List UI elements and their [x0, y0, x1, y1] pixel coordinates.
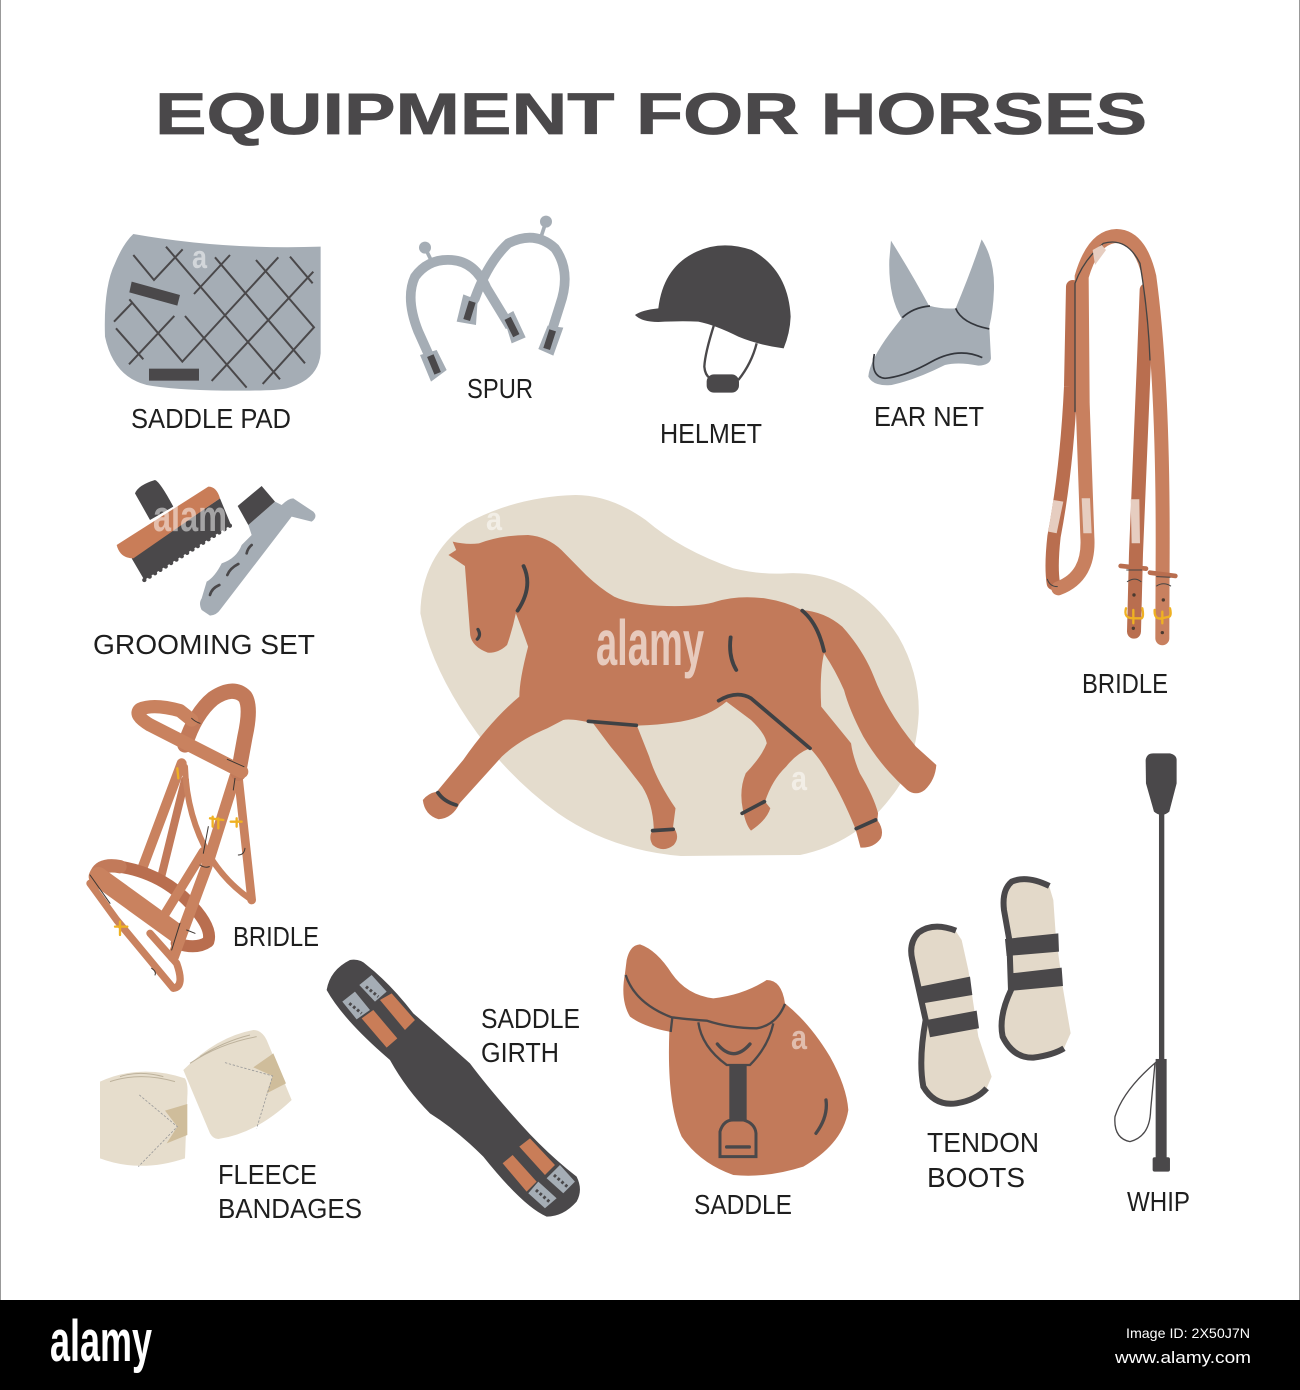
icon: whip — [1115, 753, 1177, 1172]
small watermarks: a — [791, 760, 808, 798]
right bandage — [183, 1030, 292, 1139]
label: ear net: EAR NET — [874, 401, 984, 432]
label: spur: SPUR — [467, 373, 533, 404]
label: fleece bandages — [218, 1159, 362, 1224]
label: saddle girth: SADDLE — [481, 1003, 580, 1034]
label: left bridle: BRIDLE — [233, 921, 319, 952]
icon: helmet — [635, 245, 791, 393]
left bandage — [100, 1072, 188, 1167]
label: helmet: HELMET — [660, 418, 762, 449]
label: saddle pad: SADDLE PAD — [131, 403, 291, 434]
icon: fleece bandages and saddle girth — [100, 960, 580, 1217]
small watermarks: a — [192, 239, 207, 275]
label: tendon boots: BOOTS — [927, 1162, 1025, 1193]
label: saddle: SADDLE — [694, 1189, 792, 1220]
icon: saddle pad — [105, 234, 321, 391]
label: saddle girth — [481, 1003, 580, 1068]
label: tendon boots: TENDON — [927, 1127, 1039, 1158]
icon: reins bridle — [1047, 236, 1175, 638]
small watermarks: a — [486, 501, 502, 537]
title: EQUIPMENT FOR HORSES — [155, 82, 1147, 147]
footer bar: www.alamy.com — [1114, 1348, 1251, 1367]
footer bar — [0, 1300, 1300, 1390]
icon: spur — [411, 216, 565, 382]
icon: saddle — [623, 944, 848, 1176]
label: right bridle: BRIDLE — [1082, 668, 1168, 699]
icon: horse — [423, 535, 936, 849]
label: tendon boots — [927, 1127, 1039, 1193]
saddle girth — [327, 960, 580, 1217]
label: whip: WHIP — [1127, 1186, 1190, 1217]
watermark on saddle: a — [791, 1019, 808, 1057]
icon: ear net — [868, 239, 994, 385]
label: saddle girth: GIRTH — [481, 1037, 559, 1068]
icon: blob backdrop — [420, 495, 919, 856]
small watermarks — [192, 239, 808, 798]
label: fleece bandages: BANDAGES — [218, 1193, 362, 1224]
icon: grooming set — [117, 480, 315, 616]
icon: bridle — [90, 691, 252, 988]
footer bar: alamy — [50, 1309, 152, 1374]
label: grooming set: GROOMING SET — [93, 629, 315, 660]
label: fleece bandages: FLEECE — [218, 1159, 317, 1190]
watermark on horse: alamy — [596, 607, 704, 679]
icon: tendon boots — [910, 878, 1071, 1106]
watermark on grooming set: alam — [153, 492, 227, 541]
footer bar: Image ID: 2X50J7N — [1126, 1325, 1250, 1341]
